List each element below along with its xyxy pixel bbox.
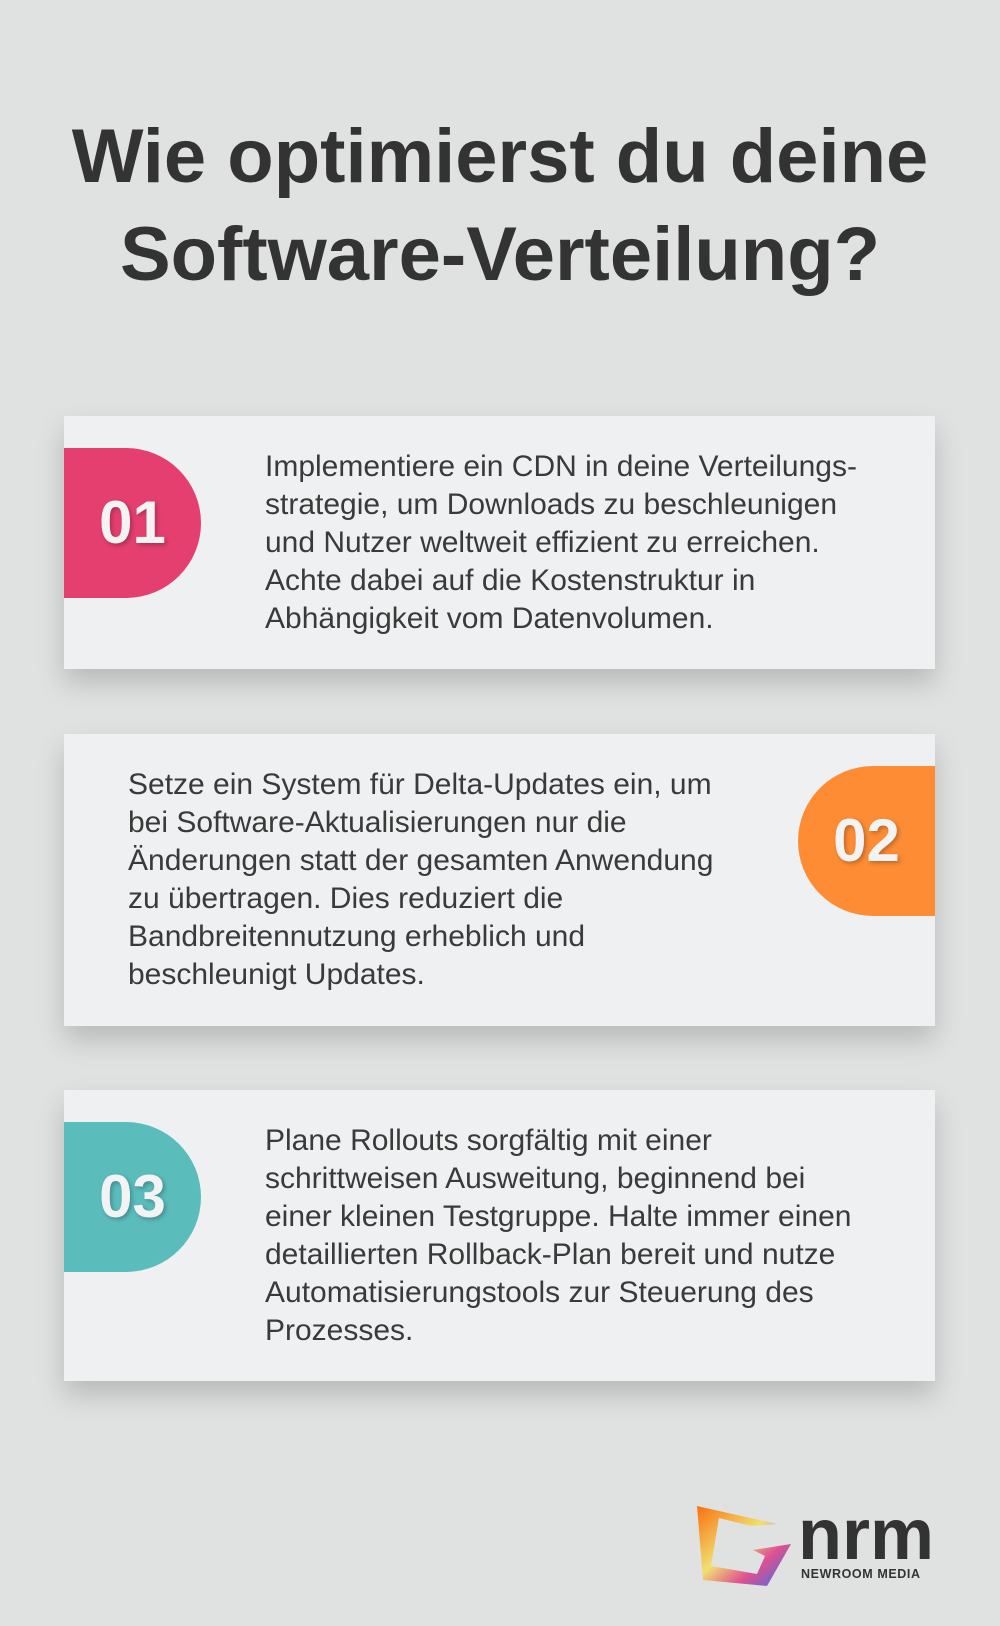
text 3: schrittweisen Ausweitung, beginnend bei [265,1162,805,1195]
text 2: Bandbreitennutzung erheblich und [128,920,585,953]
text 1: Abhängigkeit vom Datenvolumen. [265,602,714,635]
text 3: Plane Rollouts sorgfältig mit einer [265,1124,712,1157]
badge 01: 01 [99,489,166,556]
text 3: Automatisierungstools zur Steuerung des [265,1276,814,1309]
icon: logo mark [697,1506,791,1586]
badge 01 [64,448,201,598]
text 1: Achte dabei auf die Kostenstruktur in [265,564,755,597]
panel: step 1 [64,416,935,669]
logo [697,1495,934,1586]
logo text: nrm [798,1495,934,1575]
text 1 [265,450,857,635]
text 2: Setze ein System für Delta-Updates ein, um [128,768,712,801]
text 2 [128,768,713,991]
badge 02 [798,766,935,916]
badge 02: 02 [833,807,900,874]
text 3: einer kleinen Testgruppe. Halte immer einen [265,1200,851,1233]
panel: step 2 [64,734,935,1026]
text 2: Änderungen statt der gesamten Anwendung [128,844,713,877]
text 1: Implementiere ein CDN in deine Verteilungs- [265,450,857,483]
text 1: und Nutzer weltweit effizient zu erreichen. [265,526,820,559]
text 1: strategie, um Downloads zu beschleunigen [265,488,837,521]
title [72,114,928,297]
logo: NEWROOM MEDIA [801,1567,921,1581]
text 3 [265,1124,851,1347]
text 3: detaillierten Rollback-Plan bereit und nutze [265,1238,835,1271]
text 2: bei Software-Aktualisierungen nur die [128,806,627,839]
title: Software-Verteilung? [120,212,880,297]
badge 03 [64,1122,201,1272]
text 2: zu übertragen. Dies reduziert die [128,882,563,915]
text 2: beschleunigt Updates. [128,958,425,991]
panel: step 3 [64,1090,935,1381]
badge 03: 03 [99,1163,166,1230]
title: Wie optimierst du deine [72,114,928,199]
text 3: Prozesses. [265,1314,413,1347]
